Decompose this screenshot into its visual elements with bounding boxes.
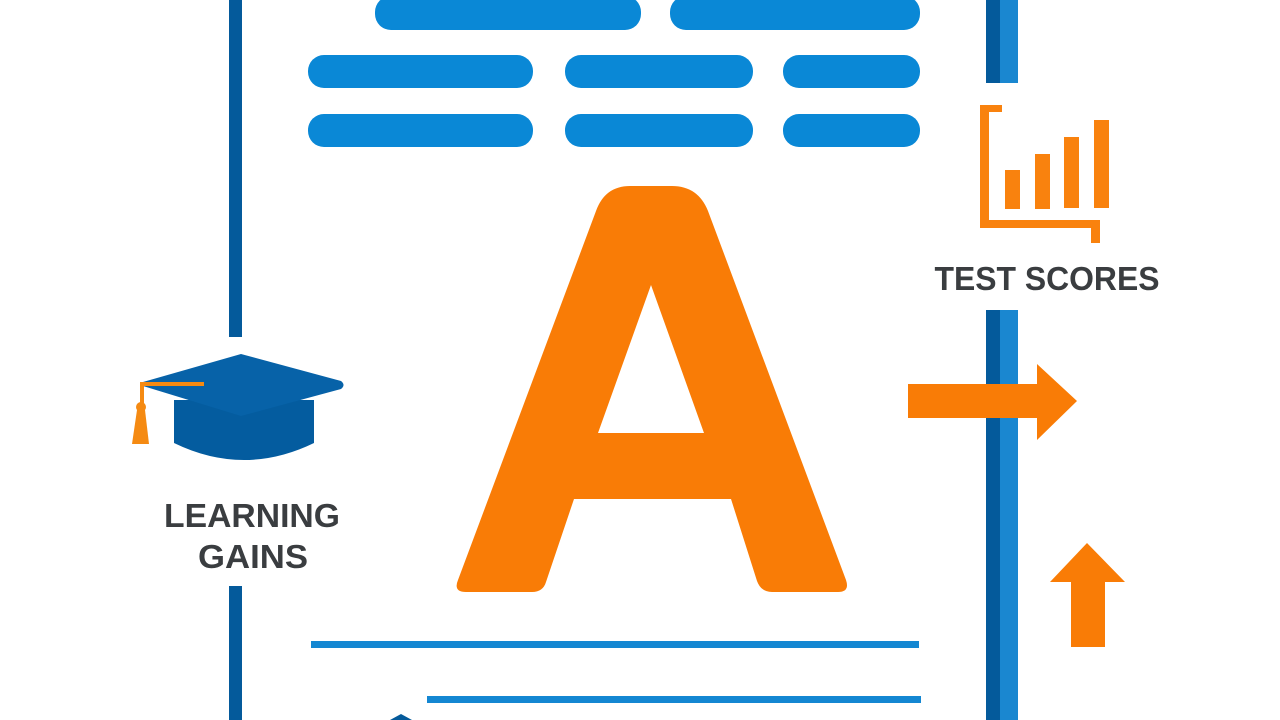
partial icon at bottom edge <box>390 714 412 720</box>
arrow: up <box>1050 543 1125 647</box>
label: learning gains <box>164 497 340 575</box>
right document border <box>986 0 1018 720</box>
left document border <box>229 0 242 720</box>
large grade letter A <box>457 186 847 592</box>
icon: bar chart <box>980 105 1109 243</box>
label: learning gains: GAINS <box>198 538 308 575</box>
label: learning gains: LEARNING <box>164 497 340 534</box>
lower divider lines <box>311 641 921 703</box>
label: test scores: TEST SCORES <box>934 260 1160 297</box>
graduation cap icon <box>132 354 344 460</box>
arrow: right <box>908 364 1077 440</box>
text placeholder bars <box>308 0 920 147</box>
